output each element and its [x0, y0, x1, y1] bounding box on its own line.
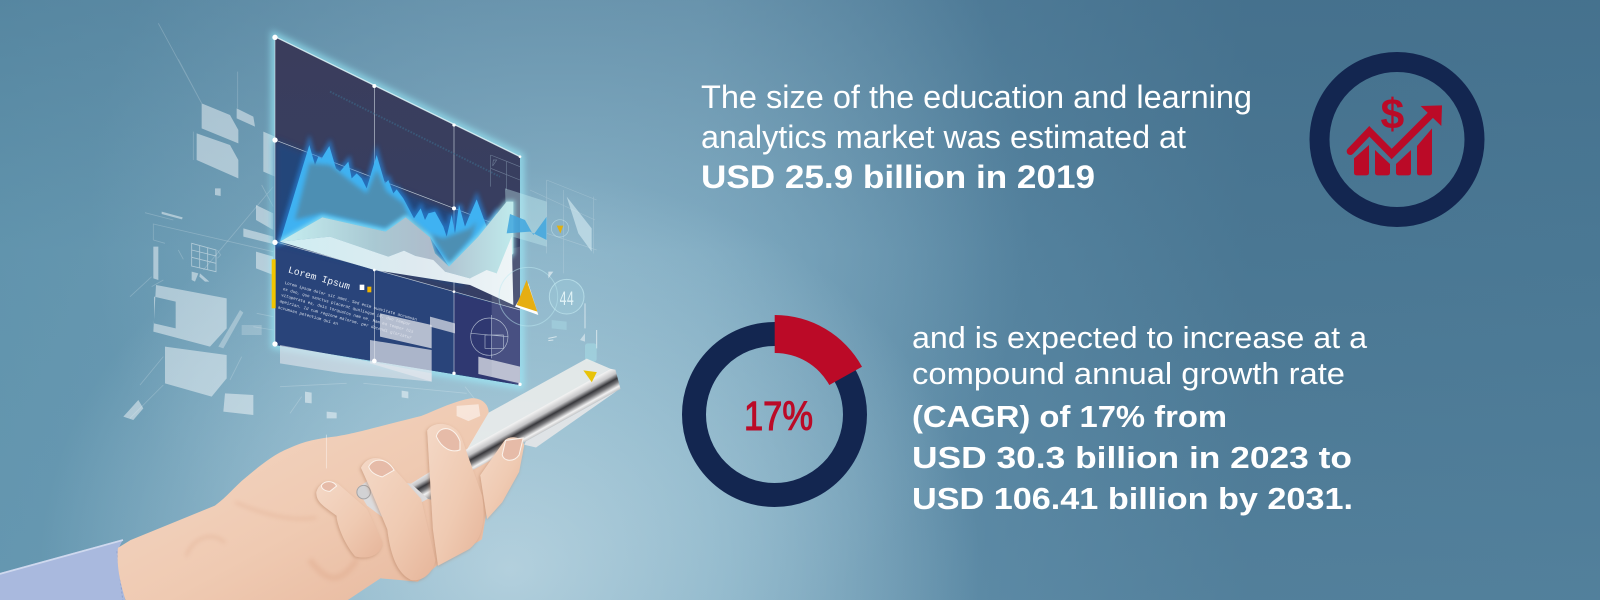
donut track [694, 334, 855, 495]
panel text [277, 265, 422, 347]
shirt sleeve [0, 539, 125, 600]
text block: growth forecast [912, 320, 1368, 516]
text block: market size [701, 79, 1252, 195]
text block: market size: analytics market was estimated at [701, 119, 1186, 155]
text block: market size: USD 25.9 billion in 2019 [701, 159, 1095, 195]
translucent sub-panel [505, 188, 547, 247]
panel text: Lorem ipsum dolor sit amet. Sed enim suavitate accumsan [284, 281, 418, 323]
overlay panels [280, 313, 520, 383]
yellow triangle [517, 280, 537, 312]
panel text: ex duo, quo sanctus placerat qualisque id. duo tempor [282, 287, 411, 328]
hologram shapes left [123, 103, 408, 420]
area chart [280, 145, 547, 305]
icon: growth chart in ring [1320, 62, 1474, 217]
hand palm [118, 398, 499, 600]
radar circle [471, 315, 508, 358]
phone [326, 359, 621, 521]
panel grid lines [275, 37, 520, 373]
label: 44: 44 [559, 289, 574, 312]
illustration: hand holding phone [0, 359, 621, 600]
donut highlighted segment [775, 315, 862, 385]
panel text: apeirian. Id cum regione malorum. per docendi gloriatur [279, 299, 413, 341]
fingers [316, 424, 524, 580]
text block: growth forecast: (CAGR) of 17% from [912, 399, 1227, 434]
text block: market size: The size of the education and learning [701, 79, 1252, 115]
text block: growth forecast: USD 30.3 billion in 2023 to [912, 440, 1352, 475]
panel text: Lorem Ipsum [287, 265, 351, 292]
ring [1320, 62, 1474, 217]
hologram right elements [499, 180, 597, 362]
text block: growth forecast: USD 106.41 billion by 2031. [912, 481, 1353, 516]
fingernails [321, 429, 523, 491]
text block: growth forecast: and is expected to increase at a [912, 320, 1368, 355]
panel text: accumsan petentium qui an [277, 305, 339, 327]
donut chart: 17% [694, 315, 862, 495]
illustration: hologram dashboard [123, 23, 597, 420]
chart panel [272, 35, 547, 386]
palm creases [186, 502, 357, 578]
donut value: 17% [744, 393, 813, 439]
panel glow [275, 37, 520, 385]
growth icon [1350, 91, 1442, 175]
growth icon: $ [1380, 91, 1404, 139]
text block: growth forecast: compound annual growth rate [912, 356, 1345, 391]
hologram lines [130, 23, 483, 418]
corner nodes [272, 35, 522, 386]
yellow side bar [272, 259, 276, 308]
panel text: vituperata ea, duis torquatos nam ne. Nam ea tempor his [280, 293, 414, 335]
